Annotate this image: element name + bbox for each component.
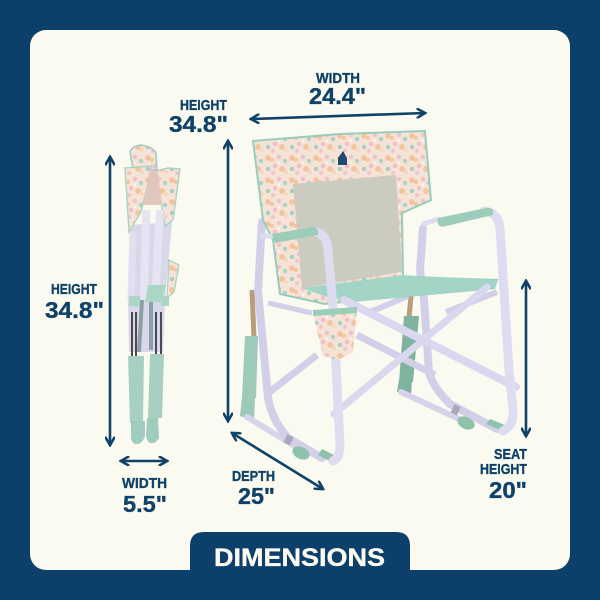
label: seat height: 20" [489,477,527,503]
folded frame backing [128,222,172,352]
left arm connector [260,234,275,238]
label: folded height [45,281,104,323]
arrow: chair width [251,113,425,119]
arrow: depth [232,433,323,489]
arrow: chair height [227,141,229,421]
seat [302,275,498,301]
cup holder [313,310,357,360]
label: depth: DEPTH [232,468,275,485]
label: depth: 25" [238,483,275,509]
rocker foot caps [284,404,510,464]
label: chair height [169,97,228,137]
label: seat height [480,446,527,503]
folded side flaps [125,166,152,232]
main front crossing bars [334,287,516,414]
banner: dimensions [190,532,410,572]
back mesh panel [293,175,402,288]
arrow: folded width [121,460,167,462]
label: folded height: HEIGHT [51,281,97,298]
illustration: folded chair [125,145,180,444]
label: chair width: WIDTH [316,70,360,87]
logo badge [338,151,347,165]
label: depth [232,468,275,509]
arrow: seat height [525,281,527,436]
label: folded width: 5.5" [123,491,167,517]
folded feet [131,421,145,444]
folded dark rods [132,312,161,358]
label: seat height: HEIGHT [480,461,527,478]
left armrest [272,227,318,243]
folded mint sleeves [128,356,144,423]
folded top fabric [130,145,157,170]
illustration: rocking chair [240,131,516,464]
right armrest [438,208,493,227]
rear sleeves and rods [240,290,419,421]
arrow: folded height [109,157,111,445]
label: seat height: SEAT [494,446,527,463]
label: folded width: WIDTH [122,475,167,492]
rear posts and rocker rails [247,222,497,458]
label: chair height: 34.8" [169,111,228,137]
label: chair width [309,70,366,109]
back fabric floral [253,131,497,304]
label: folded height: 34.8" [45,297,104,323]
label: folded width [122,475,167,517]
right front leg [484,211,513,431]
folded pocket [167,260,179,298]
banner: dimensions: DIMENSIONS [214,544,385,572]
label: chair height: HEIGHT [180,97,227,114]
seat support cross bars [267,292,497,394]
right arm connector [422,219,440,224]
cup holder rim [313,307,357,316]
left front leg [316,232,340,461]
folded frame tubes [144,210,160,300]
label: chair width: 24.4" [309,83,366,109]
